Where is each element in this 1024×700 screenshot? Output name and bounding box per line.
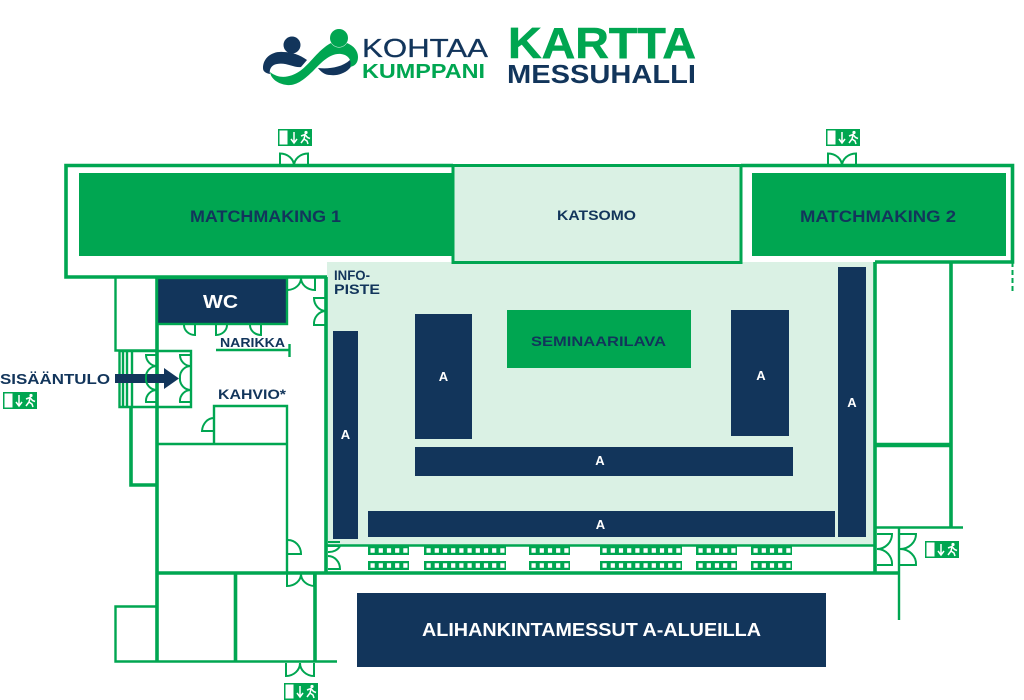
area A: left column: A bbox=[341, 427, 351, 442]
title bbox=[507, 19, 696, 89]
icon: exit sign top right bbox=[826, 129, 860, 146]
building walls bbox=[66, 166, 1012, 662]
panel: Seminaarilava: SEMINAARILAVA bbox=[531, 333, 666, 349]
panel: Katsomo: KATSOMO bbox=[557, 208, 636, 223]
panel: WC bbox=[157, 278, 287, 324]
label: Sisaantulo: SISÄÄNTULO bbox=[0, 371, 110, 388]
area A: right column bbox=[838, 267, 866, 537]
panel: WC: WC bbox=[203, 292, 238, 312]
panel: Katsomo bbox=[453, 166, 741, 262]
icon: exit sign right bbox=[925, 541, 959, 558]
area A: left column bbox=[333, 331, 358, 539]
panel: Matchmaking 2 bbox=[752, 173, 1006, 256]
icon: exit sign bottom bbox=[284, 683, 318, 700]
area A: middle row: A bbox=[595, 453, 605, 468]
logo mark: green person bbox=[270, 29, 358, 85]
logo mark: navy person bbox=[263, 36, 352, 75]
area A: inner left: A bbox=[439, 369, 449, 384]
panel: Seminaarilava bbox=[507, 310, 691, 368]
area A: middle row bbox=[415, 447, 793, 476]
seating rows bbox=[368, 546, 792, 570]
logo: KUMPPANI bbox=[362, 61, 485, 83]
area A: right column: A bbox=[847, 395, 857, 410]
logo bbox=[263, 29, 489, 85]
icon: exit sign entrance bbox=[3, 392, 37, 409]
panel: Matchmaking 2: MATCHMAKING 2 bbox=[800, 208, 956, 226]
door symbols bbox=[146, 154, 916, 676]
label: Narikka: NARIKKA bbox=[220, 336, 285, 350]
label: Infopiste bbox=[334, 267, 380, 297]
panel: Alihankintamessut bbox=[357, 593, 826, 667]
arrow: entrance bbox=[115, 368, 179, 389]
area A: inner left bbox=[415, 314, 472, 439]
area A: inner right bbox=[731, 310, 789, 436]
label: Infopiste: INFO- bbox=[334, 267, 370, 283]
label: Kahvio: KAHVIO* bbox=[218, 387, 287, 402]
title: KARTTA bbox=[508, 19, 696, 68]
label: Infopiste: PISTE bbox=[334, 281, 380, 297]
area A: lower row: A bbox=[596, 517, 606, 532]
panel: Alihankintamessut: ALIHANKINTAMESSUT A-ALUEILLA bbox=[422, 620, 761, 640]
title: MESSUHALLI bbox=[507, 59, 696, 89]
area A: lower row bbox=[368, 511, 835, 537]
panel: Matchmaking 1: MATCHMAKING 1 bbox=[190, 208, 341, 226]
area A: inner right: A bbox=[756, 368, 766, 383]
icon: exit sign top left bbox=[278, 129, 312, 146]
panel: hall floor bbox=[327, 262, 875, 545]
logo wordmark: KOHTAA bbox=[362, 33, 489, 63]
panel: Matchmaking 1 bbox=[79, 173, 453, 256]
